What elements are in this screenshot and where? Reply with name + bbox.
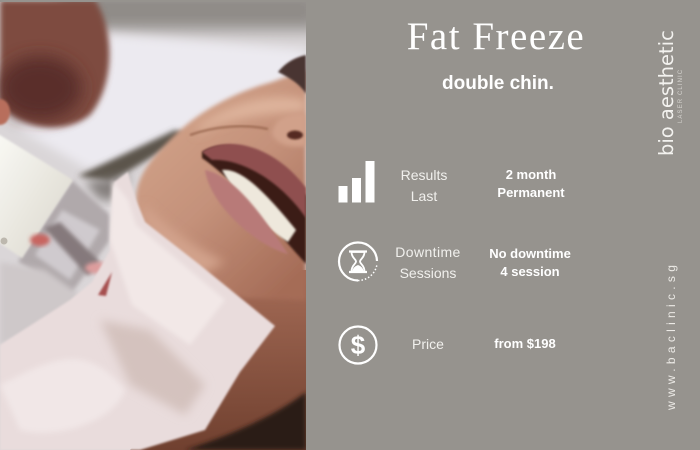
- blurred brown object: [0, 0, 109, 127]
- value: results last: 2 month: [506, 167, 556, 182]
- neck and hair: [130, 270, 306, 450]
- title: Fat Freeze: [407, 15, 585, 58]
- value: downtime sessions: [489, 246, 571, 279]
- face: [136, 70, 306, 300]
- lips and teeth: [202, 144, 306, 264]
- device: [0, 99, 111, 295]
- icon: bar chart: [338, 161, 374, 202]
- value: downtime sessions: No downtime: [489, 246, 571, 261]
- background sheet: [20, 0, 320, 200]
- value: results last: Permanent: [497, 185, 565, 200]
- white cloth wrap: [0, 172, 275, 450]
- photo: fat freeze treatment on smiling woman: [0, 2, 306, 450]
- logo name: bio aesthetic: [655, 30, 678, 156]
- value: downtime sessions: 4 session: [500, 264, 560, 279]
- subtitle: double chin.: [442, 73, 554, 94]
- icon: dollar coin: [338, 325, 378, 365]
- label: results last: Last: [411, 188, 437, 204]
- value: results last: [497, 167, 565, 200]
- website url: www.baclinic.sg: [664, 261, 678, 410]
- label: price: Price: [412, 336, 444, 352]
- right panel: [306, 0, 700, 450]
- label: downtime sessions: Sessions: [400, 265, 456, 281]
- label: downtime sessions: [395, 244, 461, 281]
- label: results last: Results: [401, 167, 447, 183]
- value: price: from $198: [494, 336, 556, 351]
- eyelashes: [278, 55, 306, 94]
- nose: [272, 114, 306, 147]
- label: downtime sessions: Downtime: [395, 244, 461, 260]
- label: results last: [401, 167, 447, 204]
- icon: hourglass timer: [338, 241, 378, 282]
- logo: bio aesthetic: [655, 30, 684, 156]
- icon: dollar coin: $: [351, 330, 366, 360]
- logo tagline: LASER CLINIC: [678, 69, 684, 123]
